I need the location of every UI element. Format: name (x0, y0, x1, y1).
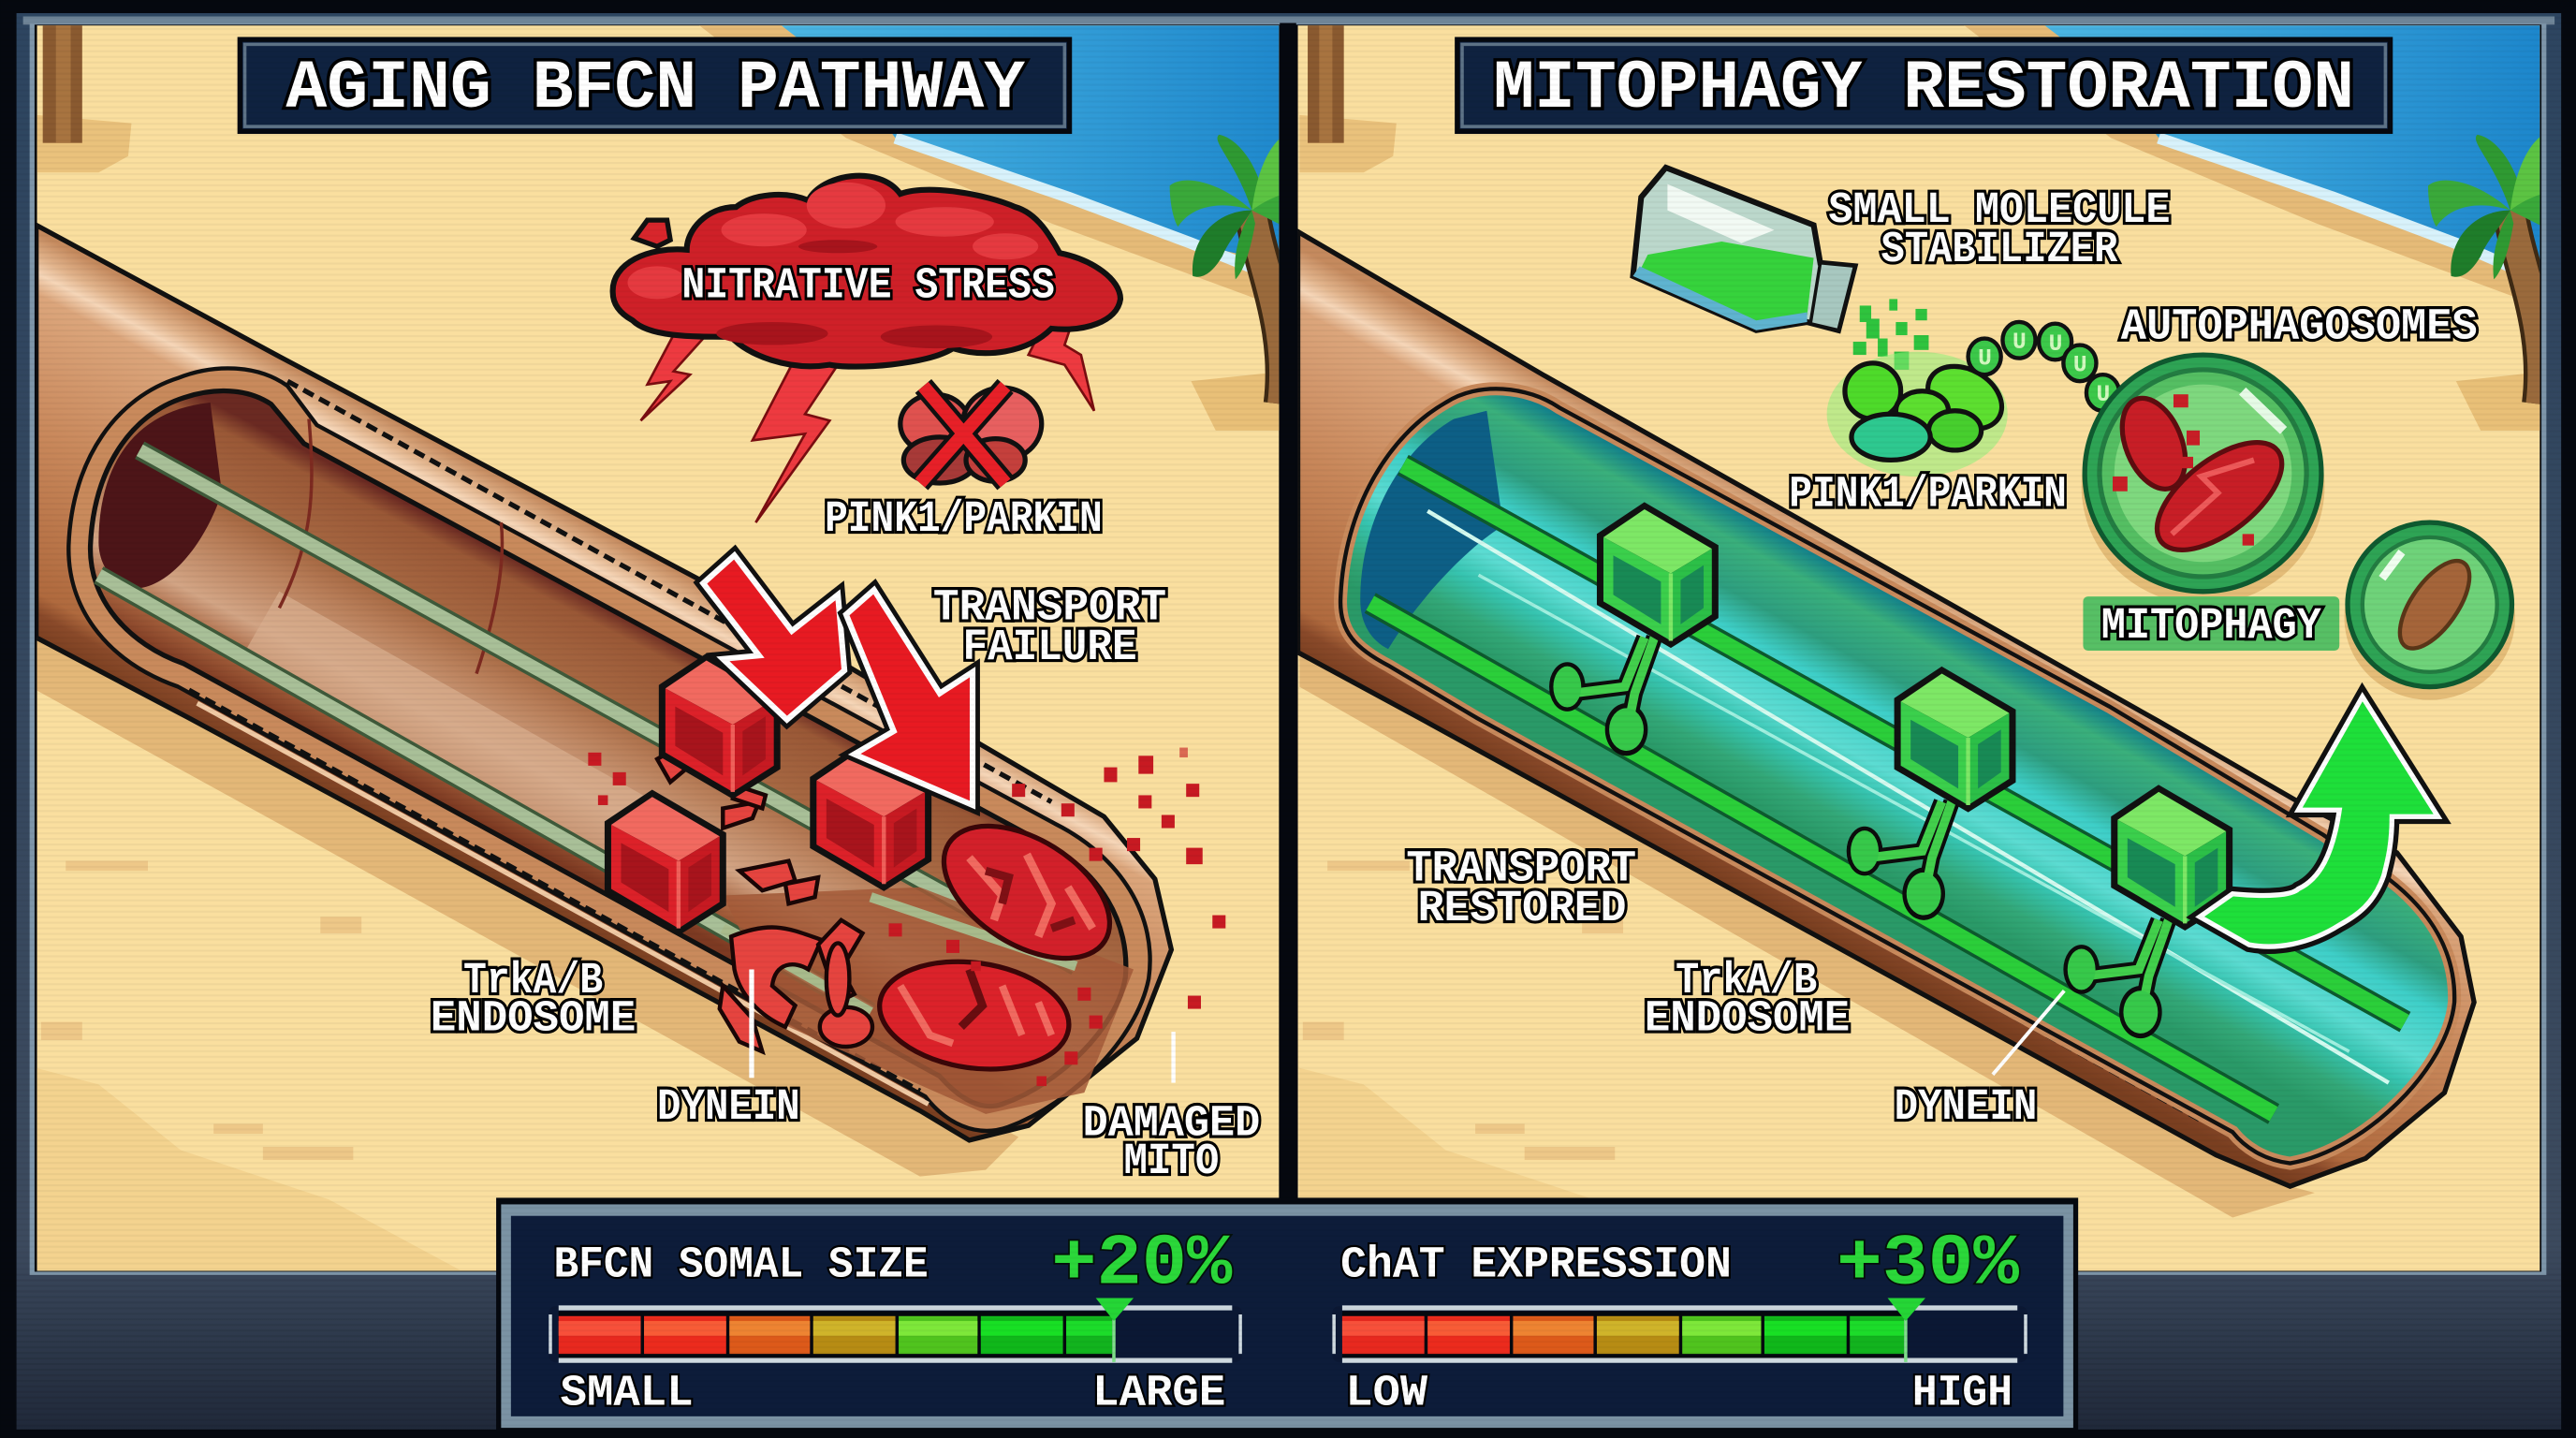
label: mitophagy: MITOPHAGY (2101, 602, 2321, 652)
title: mitophagy restoration: MITOPHAGY RESTORATION (1493, 51, 2354, 128)
label: transport restored (1406, 845, 1636, 934)
label: dynein: DYNEIN (657, 1083, 800, 1133)
leader line: damaged mito (1171, 1032, 1176, 1083)
label: TrkA/B endosome: TrkA/B (463, 957, 603, 1006)
green curved arrow (2200, 697, 2438, 946)
center divider (1280, 23, 1296, 1199)
label: transport failure (933, 584, 1166, 673)
metric: BFCN somal size: +20% (1051, 1225, 1233, 1306)
label: nitrative stress: NITRATIVE STRESS (681, 262, 1055, 312)
red debris scatter (588, 748, 1225, 1086)
label: TrkA/B endosome: TrkA/B (1676, 957, 1817, 1006)
ubiquitin chain: U (1978, 347, 1992, 373)
label: dynein: DYNEIN (1895, 1083, 2037, 1133)
mitophagy vesicle (2344, 522, 2515, 700)
metric: BFCN somal size (549, 1225, 1242, 1419)
title: aging BFCN pathway: AGING BFCN PATHWAY (285, 51, 1026, 128)
label: TrkA/B endosome (431, 957, 636, 1044)
panel: mitophagy restoration (1295, 20, 2576, 1275)
label: small molecule stabilizer: SMALL MOLECULE (1828, 186, 2170, 236)
label: TrkA/B endosome: ENDOSOME (431, 994, 636, 1044)
ubiquitin chain: U (2049, 332, 2062, 358)
label: damaged mito (1083, 1100, 1260, 1187)
metric: BFCN somal size: BFCN SOMAL SIZE (554, 1241, 929, 1291)
label: damaged mito: DAMAGED (1083, 1100, 1260, 1150)
green molecule particles (1853, 299, 1928, 370)
left panel artwork: beach and degenerating axon (33, 20, 1325, 1275)
metric: BFCN somal size: SMALL (561, 1370, 694, 1419)
metric: ChAT expression: ChAT EXPRESSION (1340, 1241, 1732, 1291)
gauge bar: somal size (549, 1298, 1242, 1362)
icon: small molecule vial (1633, 168, 1854, 330)
label: transport failure: FAILURE (963, 624, 1137, 673)
label: TrkA/B endosome: ENDOSOME (1645, 994, 1850, 1044)
metric: ChAT expression (1332, 1225, 2027, 1419)
metric: BFCN somal size: LARGE (1092, 1370, 1225, 1419)
label: damaged mito: MITO (1123, 1137, 1219, 1187)
transport blocked cubes (607, 657, 929, 932)
metrics panel (496, 1197, 2078, 1432)
damaged mitochondrion lower (877, 959, 1071, 1072)
right panel artwork: beach and restored axon (1295, 20, 2576, 1275)
panel: aging BFCN pathway (33, 20, 1325, 1275)
icon: failed PINK1/Parkin blob (900, 386, 1042, 483)
label: transport failure: TRANSPORT (933, 584, 1166, 634)
damaged mitochondrion upper (942, 824, 1112, 961)
torn dynein debris (657, 746, 872, 1051)
autophagosome with damaged mitochondria (2082, 355, 2324, 605)
label: small molecule stabilizer: STABILIZER (1881, 226, 2118, 275)
gauge bar: ChAT expression (1332, 1298, 2027, 1362)
leader line: dynein (1993, 990, 2064, 1075)
icon: activated PINK1/Parkin (1827, 352, 2012, 477)
transport cargo: cube one (1549, 506, 1715, 756)
label: transport restored: RESTORED (1418, 885, 1627, 934)
ubiquitin chain: U (2012, 330, 2027, 356)
transport cargo: cube three (2063, 788, 2230, 1038)
label: small molecule stabilizer (1828, 186, 2170, 275)
metric: ChAT expression: LOW (1345, 1370, 1428, 1419)
ubiquitin chain: U (2096, 383, 2110, 408)
leader line: dynein (749, 969, 754, 1078)
red arrows: transport failure (703, 555, 973, 805)
label: transport restored: TRANSPORT (1406, 845, 1636, 895)
metric: ChAT expression: +30% (1837, 1225, 2020, 1306)
ubiquitin chain (1969, 322, 2119, 411)
label: PINK1/PARKIN: PINK1/PARKIN (1789, 471, 2067, 521)
label: PINK1/PARKIN: PINK1/PARKIN (825, 495, 1103, 545)
ubiquitin chain: U (2073, 354, 2087, 379)
label: TrkA/B endosome (1645, 957, 1850, 1044)
label: autophagosomes: AUTOPHAGOSOMES (2121, 303, 2478, 353)
metric: ChAT expression: HIGH (1912, 1370, 2012, 1419)
nitrative stress cloud (613, 176, 1120, 522)
transport cargo: cube two (1847, 670, 2012, 920)
